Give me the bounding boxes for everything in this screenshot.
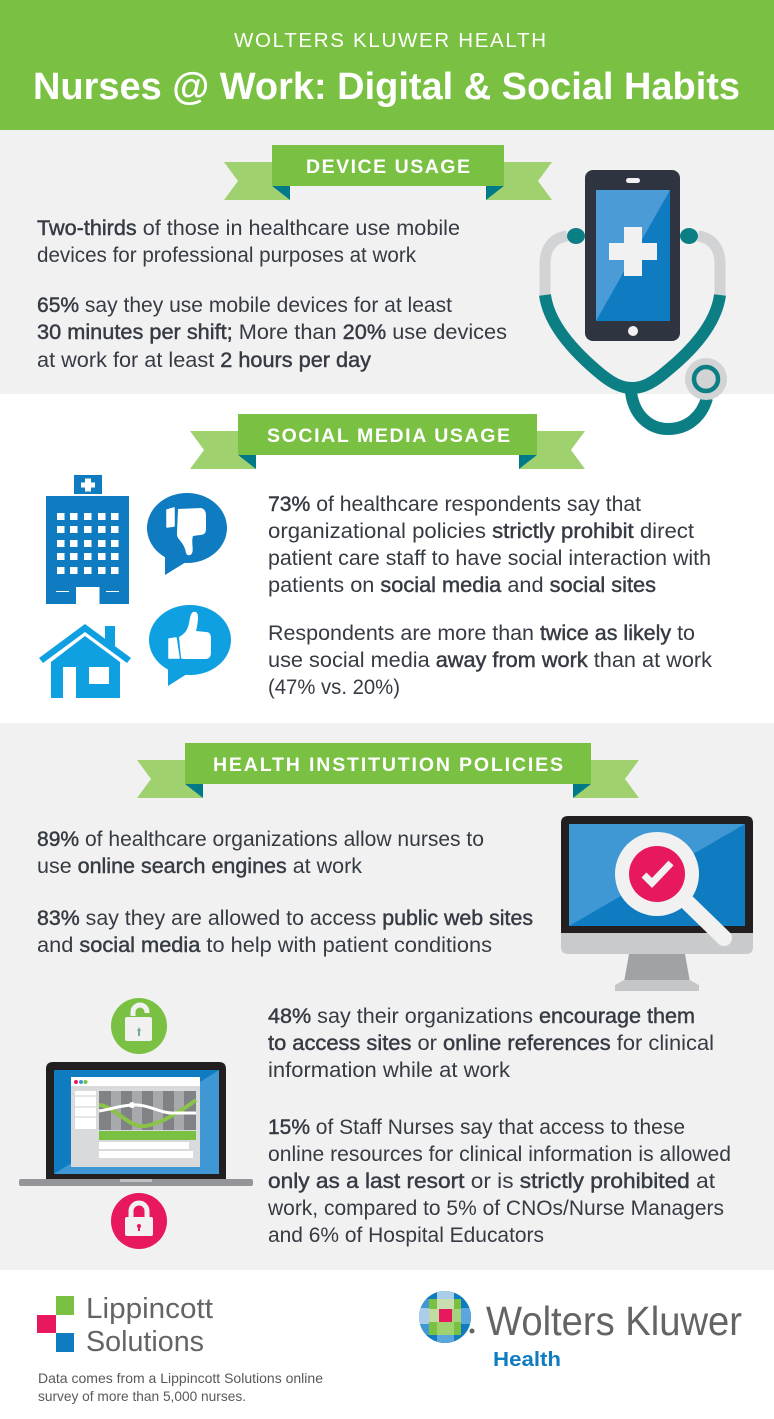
text block: clinical information access: and 6% of Hospital Educators: [268, 1224, 544, 1247]
text block: clinical information access: online resources for clinical information is allowed: [268, 1143, 731, 1166]
heading ribbon: health institution policies: HEALTH INSTITUTION POLICIES: [213, 754, 563, 776]
header banner: WOLTERS KLUWER HEALTH: [234, 29, 546, 52]
logo: Wolters Kluwer Health: Wolters Kluwer: [486, 1298, 742, 1344]
heading ribbon: device usage: [224, 145, 552, 200]
text block: device usage: 30 minutes per shift; More than 20% use devices: [37, 321, 507, 344]
icon: hospital: [46, 475, 129, 604]
icon: pink closed lock: [111, 1193, 167, 1249]
heading ribbon: social media usage: [190, 414, 585, 469]
text block: search and web access: [37, 828, 533, 957]
text block: social media usage: Respondents are more than twice as likely to: [268, 622, 695, 645]
text block: clinical information access: only as a last resort or is strictly prohibited at: [268, 1170, 715, 1193]
text block: clinical information access: work, compared to 5% of CNOs/Nurse Managers: [267, 1197, 724, 1220]
icon: thumbs up bubble: [149, 605, 231, 686]
icon: green open lock: [111, 998, 167, 1054]
source note: [38, 1370, 323, 1404]
text block: social media usage: organizational policies strictly prohibit direct: [268, 520, 694, 543]
heading ribbon: health institution policies: [137, 743, 639, 798]
text block: clinical information access: to access sites or online references for clinical: [268, 1032, 714, 1055]
source note: Data comes from a Lippincott Solutions online: [38, 1370, 323, 1386]
text block: search and web access: 83% say they are allowed to access public web sites: [37, 907, 533, 930]
source note: survey of more than 5,000 nurses.: [38, 1388, 246, 1404]
heading ribbon: device usage: DEVICE USAGE: [306, 156, 470, 178]
icon: laptop with chart window: [19, 1062, 253, 1186]
logo: Wolters Kluwer Health: Health: [493, 1348, 561, 1371]
text block: device usage: Two-thirds of those in healthcare use mobile: [37, 217, 460, 240]
text block: search and web access: use online search engines at work: [37, 855, 363, 878]
icon: phone with stethoscope: [545, 170, 727, 429]
header banner: Nurses @ Work: Digital & Social Habits: [33, 66, 740, 108]
icon: house: [39, 624, 131, 698]
text block: social media usage: use social media away from work than at work: [268, 649, 713, 672]
text block: search and web access: and social media to help with patient conditions: [37, 934, 492, 957]
text block: social media usage: patient care staff to have social interaction with: [268, 547, 711, 570]
text block: clinical information access: 48% say their organizations encourage them: [268, 1005, 695, 1028]
text block: social media usage: 73% of healthcare respondents say that: [268, 493, 641, 516]
text block: device usage: [37, 217, 507, 372]
heading ribbon: social media usage: SOCIAL MEDIA USAGE: [267, 425, 510, 447]
text block: device usage: at work for at least 2 hours per day: [37, 349, 372, 372]
text block: social media usage: (47% vs. 20%): [268, 676, 400, 699]
text block: clinical information access: 15% of Staff Nurses say that access to these: [268, 1116, 685, 1139]
logo: Lippincott Solutions: [37, 1293, 213, 1358]
text block: social media usage: patients on social media and social sites: [268, 574, 656, 597]
icon: thumbs down bubble: [147, 493, 227, 575]
logo: Wolters Kluwer Health: [419, 1291, 742, 1371]
text block: device usage: devices for professional purposes at work: [37, 244, 416, 267]
icon: monitor with magnifier: [561, 816, 753, 991]
logo: Lippincott Solutions: Lippincott: [86, 1293, 213, 1325]
text block: social media usage: [268, 493, 713, 699]
header banner: [0, 0, 774, 130]
text block: clinical information access: [267, 1005, 731, 1247]
text block: search and web access: 89% of healthcare organizations allow nurses to: [37, 828, 484, 851]
text block: device usage: 65% say they use mobile devices for at least: [37, 294, 452, 317]
logo: Lippincott Solutions: Solutions: [86, 1326, 204, 1358]
text block: clinical information access: information while at work: [268, 1059, 511, 1082]
